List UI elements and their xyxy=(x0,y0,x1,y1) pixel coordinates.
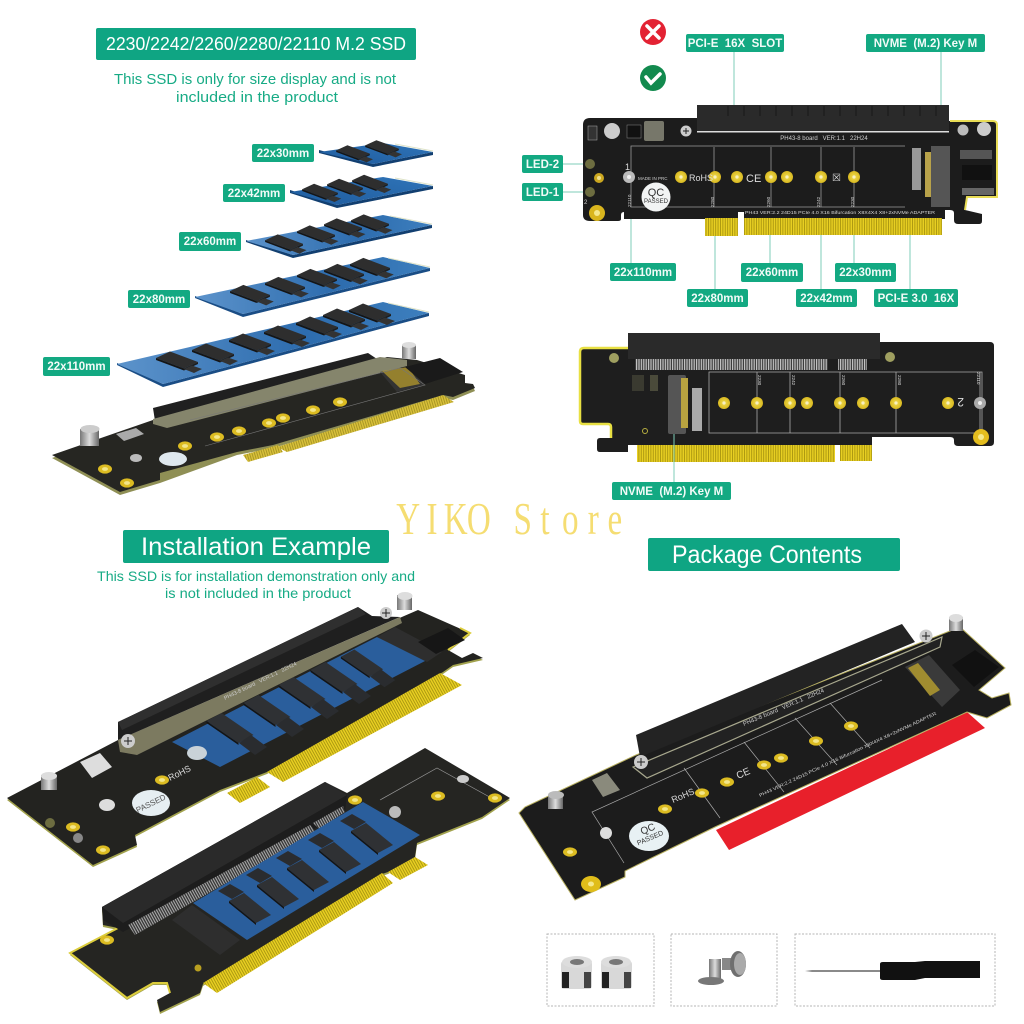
size labels: 22x80mm xyxy=(133,294,185,306)
PCIe slot xyxy=(697,105,949,132)
board print: 22110 xyxy=(627,194,632,207)
installed SSD xyxy=(172,802,420,955)
board xyxy=(70,748,510,1014)
note: installation demonstration only: This SSD is for installation demonstration only and xyxy=(97,568,415,584)
QC sticker xyxy=(642,182,670,212)
panel: top view of adapter xyxy=(522,34,997,307)
panel: installed top board xyxy=(7,592,483,867)
gold fingers xyxy=(705,212,942,236)
board print: 2260 xyxy=(766,196,771,207)
box: screw and stud xyxy=(671,934,777,1006)
heading: package contents xyxy=(648,538,900,571)
board outline xyxy=(580,333,994,452)
board print: 2230 xyxy=(757,375,762,386)
SSD 22x110mm xyxy=(117,302,429,387)
mounting holes xyxy=(563,721,858,892)
size labels: 22x42mm xyxy=(228,188,280,200)
callout labels: 22x42mm xyxy=(800,293,853,305)
note: size display only xyxy=(114,71,397,106)
board parts: RoHS xyxy=(166,763,192,783)
callout labels: 22x110mm xyxy=(614,267,672,279)
board print: PH43 VER:2.2 24D15 PCIe 4.0 X16 Bifurcation X8X4X4 X8+2xNVMe ADAPTER xyxy=(745,210,936,215)
callout labels: LED-1 xyxy=(526,187,560,199)
board print xyxy=(670,711,938,805)
slot and rail xyxy=(118,607,402,755)
gold fingers xyxy=(203,857,428,993)
size labels: 22x60mm xyxy=(184,236,236,248)
callout labels: PCI-E 3.0 16X xyxy=(878,293,955,305)
board print: PH43-8 board VER:1.1 22H24 xyxy=(780,136,868,142)
installed SSD xyxy=(172,627,442,767)
heading: SSD sizes: 2230/2242/2260/2280/22110 M.2 SSD xyxy=(106,34,406,54)
board print: 2 xyxy=(957,395,964,409)
board xyxy=(7,610,483,867)
board parts: PASSED xyxy=(135,793,167,815)
callout leader lines xyxy=(563,52,941,289)
SSD 22x80mm xyxy=(195,257,430,317)
size labels: 22x30mm xyxy=(257,148,309,160)
gold fingers xyxy=(227,673,462,803)
callout labels: 22x30mm xyxy=(839,267,892,279)
heading: package contents: Package Contents xyxy=(672,541,862,569)
panel: rear view of adapter xyxy=(580,333,994,500)
SSD 22x60mm xyxy=(246,214,432,258)
callout labels: 22x80mm xyxy=(691,293,744,305)
icon: green check xyxy=(640,65,666,91)
SSD 22x30mm xyxy=(319,140,433,167)
panel: packaged board xyxy=(519,614,1011,900)
mounting holes xyxy=(585,159,860,221)
callout label: NVME (M.2) Key M xyxy=(620,486,723,498)
red finger protector xyxy=(716,712,985,850)
board print: 2242 xyxy=(816,196,821,207)
box: screwdriver xyxy=(795,934,995,1006)
board print: 2 xyxy=(584,200,588,206)
QC sticker: PASSED xyxy=(636,830,665,847)
board print xyxy=(584,136,936,215)
board print: 22110 xyxy=(976,372,981,385)
QC sticker xyxy=(629,821,669,851)
board xyxy=(519,627,1011,900)
size labels xyxy=(43,144,314,376)
board components xyxy=(588,121,994,195)
leader line xyxy=(673,434,675,482)
SSD 22x42mm xyxy=(290,175,433,208)
board print: RoHS xyxy=(670,786,696,805)
gold fingers xyxy=(637,445,872,462)
note: size display only: This SSD is only for size display and is not xyxy=(114,71,397,88)
QC sticker: PASSED xyxy=(644,199,669,205)
board print xyxy=(757,372,981,409)
board print: 2260 xyxy=(841,375,846,386)
QC sticker: QC xyxy=(639,822,657,838)
slot and rail: PH43-8 board VER:1.1 22H24 xyxy=(742,688,826,728)
slot and rail xyxy=(633,624,942,778)
board print: 2280 xyxy=(710,196,715,207)
note: installation demonstration only xyxy=(97,568,415,601)
icon: red cross xyxy=(640,19,666,45)
board print: PH43 VER:2.2 24D15 PCIe 4.0 X16 Bifurcation X8X4X4 X8+2xNVMe ADAPTER xyxy=(758,711,938,798)
slot and rail: PH43-8 board VER:1.1 22H24 xyxy=(223,661,298,702)
panel: installed rear board xyxy=(70,748,510,1014)
board print: MADE IN PRC xyxy=(638,176,668,181)
slot body and pins xyxy=(628,333,880,370)
components xyxy=(548,614,999,809)
size labels: 22x110mm xyxy=(47,361,106,373)
board print: CE xyxy=(746,173,761,185)
m.2 grid lines xyxy=(592,680,882,863)
callout labels: LED-2 xyxy=(526,159,559,171)
board print: 2230 xyxy=(850,196,855,207)
note: installation demonstration only: is not included in the product xyxy=(165,585,351,601)
box: standoffs xyxy=(547,934,654,1006)
board print: ☒ xyxy=(832,173,841,184)
heading: SSD sizes xyxy=(96,28,416,60)
board print: 2242 xyxy=(791,375,796,386)
slot body and pins xyxy=(102,782,347,935)
watermark: YIKO Store xyxy=(396,493,622,544)
callout labels: NVME (M.2) Key M xyxy=(874,38,977,50)
callout labels: 22x60mm xyxy=(746,267,798,279)
board parts xyxy=(41,592,465,855)
mounting holes xyxy=(609,352,989,445)
SSD stack diagram xyxy=(43,140,475,495)
board print: 1 xyxy=(625,162,630,172)
board print: CE xyxy=(735,766,752,782)
callout labels: PCI-E 16X SLOT xyxy=(688,38,782,50)
callout label xyxy=(612,482,731,500)
panel: accessories xyxy=(547,934,995,1006)
status icons xyxy=(640,19,666,91)
callout labels xyxy=(522,34,985,307)
note: size display only: included in the product xyxy=(176,89,339,106)
m.2 connector and print xyxy=(632,372,982,434)
board print: 2280 xyxy=(897,375,902,386)
board print: RoHS xyxy=(689,173,713,183)
mounting holes xyxy=(100,775,502,972)
adapter board, angled view xyxy=(52,342,475,495)
board outline xyxy=(583,118,997,224)
heading: installation example: Installation Example xyxy=(141,533,371,561)
QC sticker: QC xyxy=(648,187,664,199)
m.2 area xyxy=(631,146,950,207)
